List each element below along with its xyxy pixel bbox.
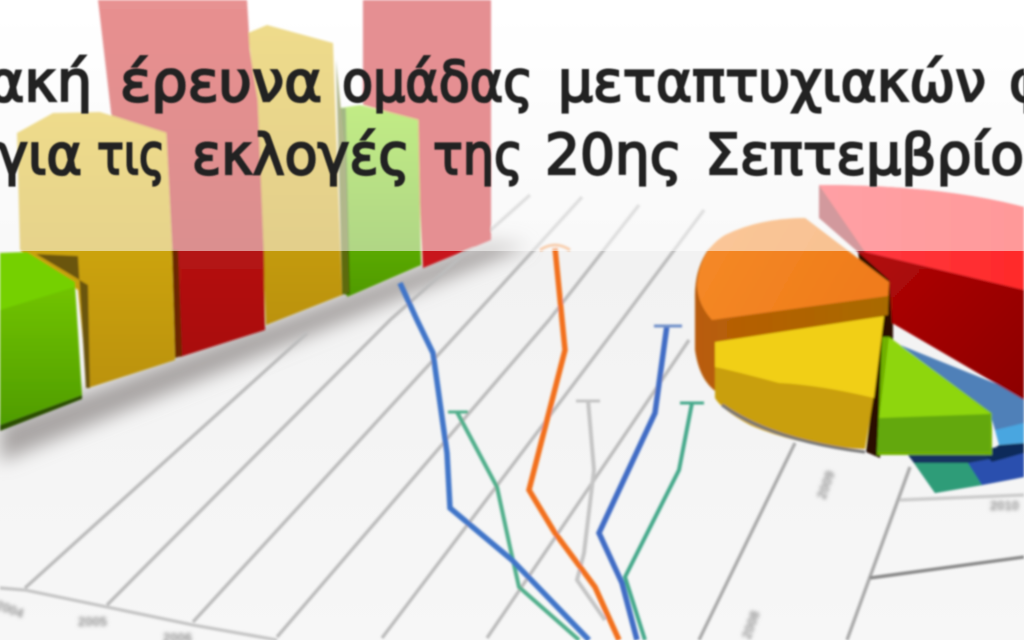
pie slice: teal and blue base <box>908 445 1024 493</box>
title line 1: ομάδας <box>342 50 533 115</box>
title line 2: της <box>433 123 523 188</box>
line series: gray <box>576 400 605 620</box>
bar: green back <box>340 105 421 297</box>
pie slice: orange <box>695 218 889 395</box>
bar: green front <box>0 252 82 431</box>
line series: orange <box>529 245 619 640</box>
axis year labels <box>0 469 1019 640</box>
shadow under the bars <box>0 240 530 462</box>
pie slice: green <box>877 337 992 455</box>
grid lines <box>0 195 1024 640</box>
pie slice: blue <box>900 345 1024 462</box>
bar: yellow short <box>17 112 175 388</box>
title line 1: έρευνα <box>120 50 322 115</box>
title line 2: 20ης <box>545 123 682 188</box>
line series: blue 1 <box>400 283 589 640</box>
translucent title band <box>0 0 1024 251</box>
title line 2: εκλογές <box>192 123 410 188</box>
axis year labels: 2005 <box>78 614 107 629</box>
title <box>0 50 1024 188</box>
pie slice: red <box>819 185 1024 400</box>
bar: yellow tall <box>248 25 349 325</box>
title line 2: τις <box>97 123 165 188</box>
axis year labels: 2009 <box>814 469 838 501</box>
bar: red back right <box>363 0 491 268</box>
bar: red tall <box>98 0 265 358</box>
pie dark core <box>858 250 893 458</box>
title line 2: Σεπτεμβρίο <box>705 123 1024 188</box>
title line 1: μεταπτυχιακών <box>558 50 986 115</box>
line series: green 1 <box>448 412 579 640</box>
axis year labels: 2010 <box>990 498 1019 513</box>
pie slice: yellow <box>715 316 884 452</box>
line series: blue 2 <box>599 325 682 640</box>
line series: green 2 <box>625 403 704 640</box>
